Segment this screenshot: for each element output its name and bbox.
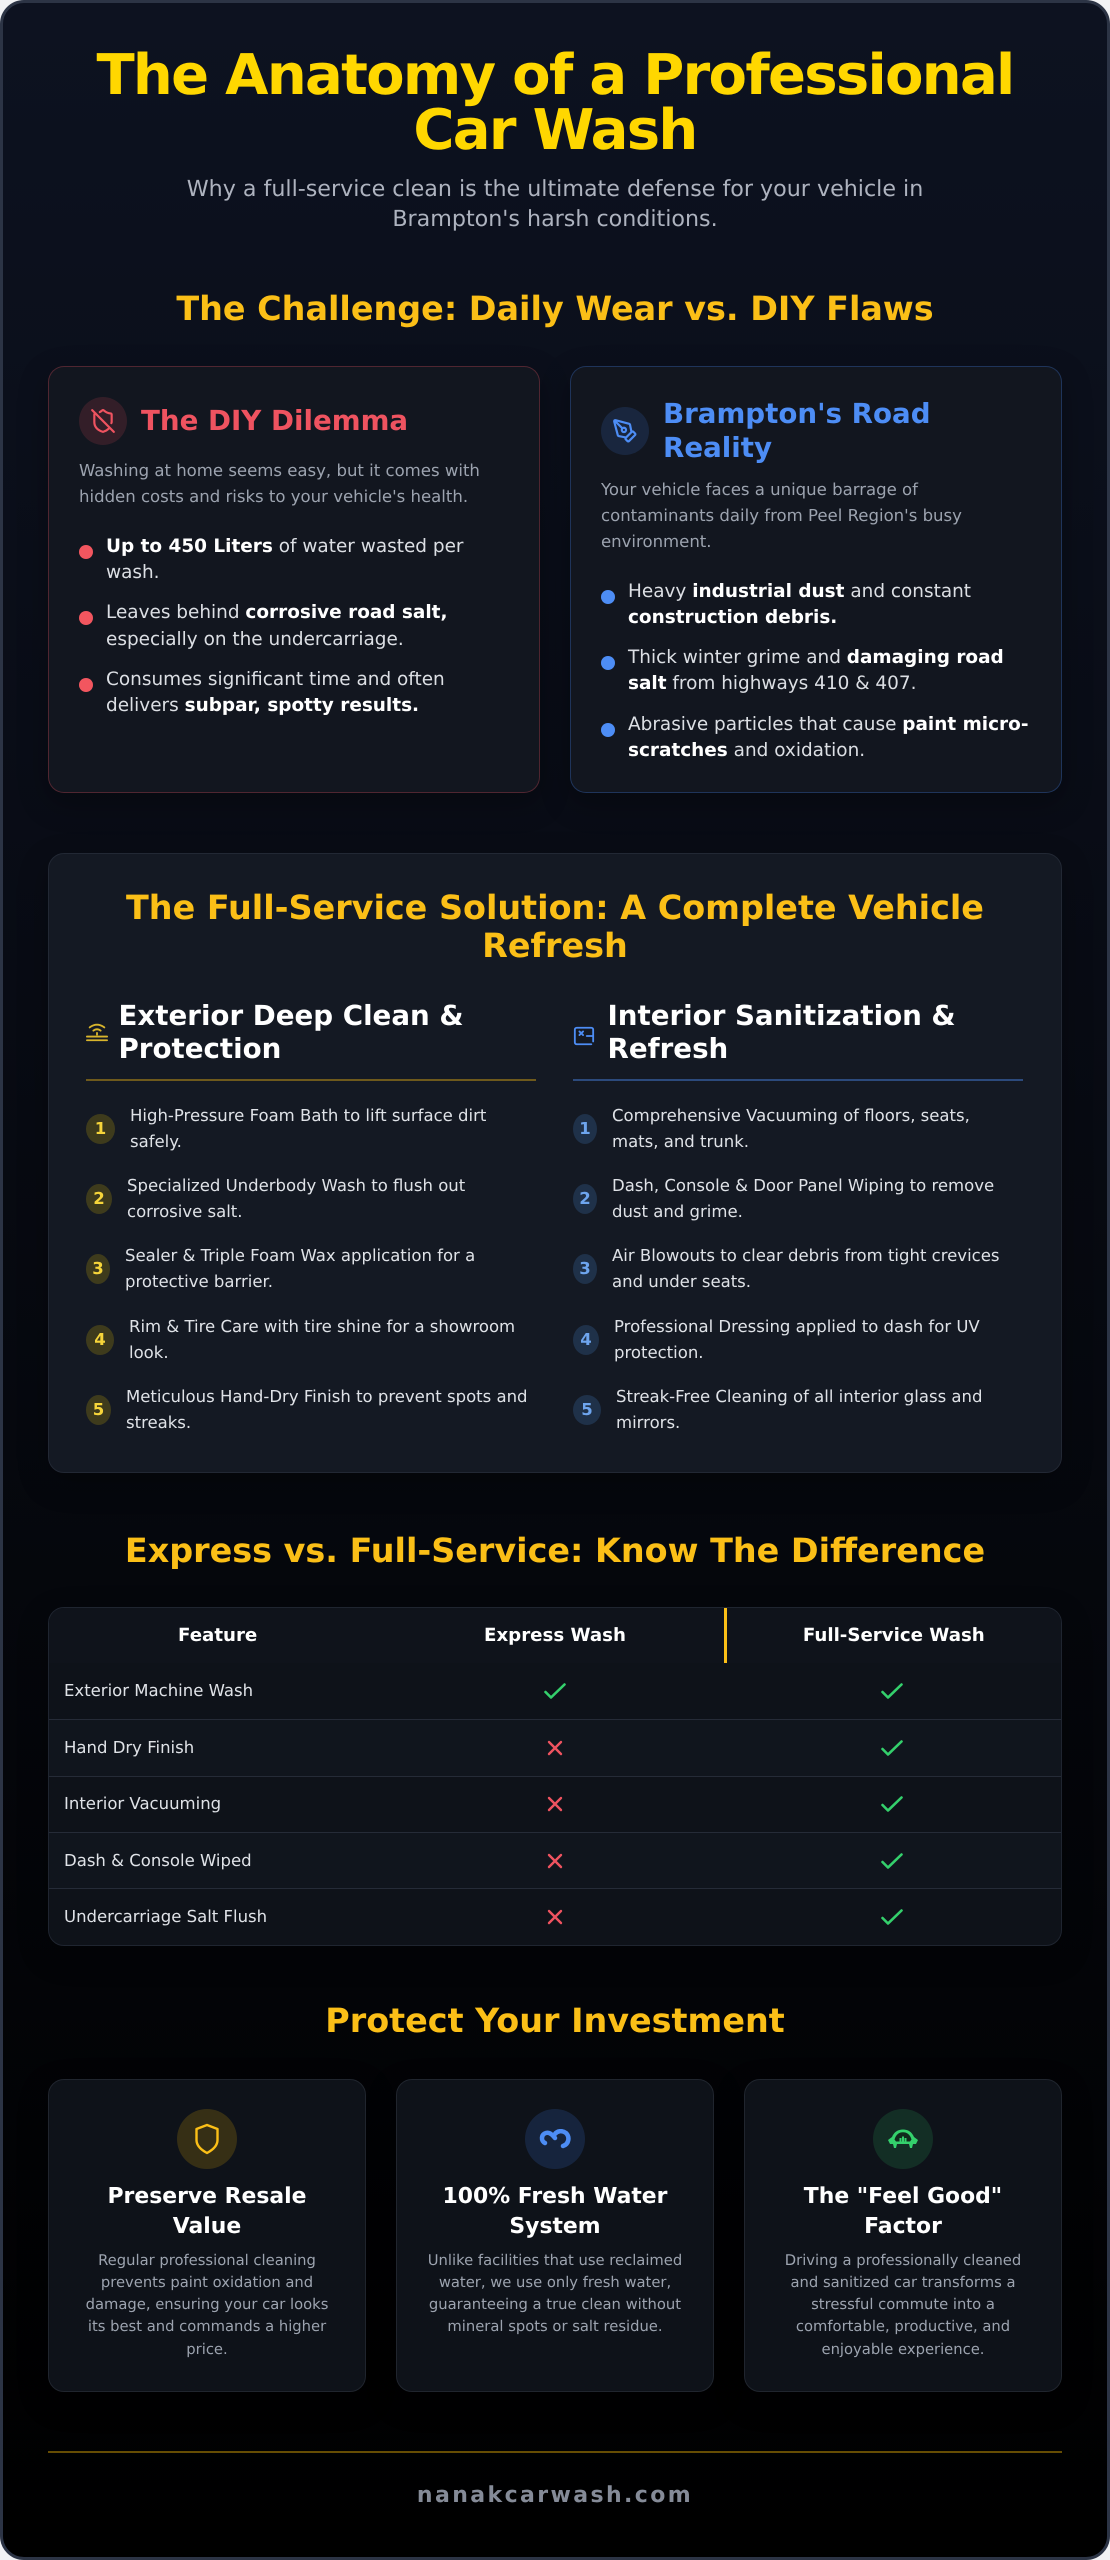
column: interior sanitization [573, 999, 1023, 1432]
benefit text: and sanitized car transforms a [790, 2274, 1015, 2291]
step 2 [573, 1176, 994, 1221]
step 3 [573, 1246, 999, 1291]
table header: Feature [178, 1625, 257, 1646]
heading: full-service solution [126, 888, 984, 964]
card description: hidden costs and risks to your vehicle's health. [79, 487, 468, 506]
step 2: Dash, Console & Door Panel Wiping to remove [612, 1176, 994, 1195]
card title: Brampton's Road [663, 397, 931, 430]
row: interior vacuuming: Interior Vacuuming [64, 1794, 221, 1813]
list: DIY problems [79, 536, 464, 716]
benefit text: prevents paint oxidation and [101, 2274, 313, 2291]
column title: Exterior Deep Clean & [118, 999, 464, 1032]
heading: full-service solution: Refresh [482, 926, 628, 964]
card description: Washing at home seems easy, but it comes with [79, 461, 480, 480]
benefit text [428, 2252, 682, 2335]
list item: Consumes significant time and often [106, 669, 445, 690]
step 3: Sealer & Triple Foam Wax application for a [125, 1246, 475, 1265]
card description: contaminants daily from Peel Region's busy [601, 506, 962, 525]
heading: protect your investment: Protect Your Investment [325, 2001, 785, 2040]
row: exterior machine wash: Exterior Machine Wash [64, 1681, 253, 1700]
step 1: mats, and trunk. [612, 1132, 749, 1150]
icon: pen nib [601, 407, 649, 455]
column title: Refresh [608, 1032, 728, 1065]
list item: especially on the undercarriage. [106, 628, 404, 650]
step 4 [86, 1316, 515, 1362]
row: hand dry finish [49, 1719, 1061, 1776]
heading: the challenge: The Challenge: Daily Wear vs. DIY Flaws [176, 289, 934, 328]
benefit title: Preserve Resale [108, 2184, 306, 2209]
step 1: 1 [95, 1118, 106, 1138]
step 4: Professional Dressing applied to dash for UV [614, 1316, 980, 1336]
benefit text: comfortable, productive, and [796, 2318, 1010, 2335]
step 4: Rim & Tire Care with tire shine for a showroom [129, 1316, 515, 1336]
benefit text: Driving a professionally cleaned [785, 2252, 1021, 2268]
row: exterior machine wash [64, 1681, 903, 1700]
benefit text: price. [186, 2341, 228, 2358]
card description: Your vehicle faces a unique barrage of [601, 480, 918, 499]
table header [49, 1608, 1061, 1663]
list item: Leaves behind corrosive road salt, [106, 602, 447, 623]
list item: salt from highways 410 & 407. [628, 673, 916, 694]
list: road hazards [601, 581, 1028, 761]
step 3 [86, 1246, 475, 1291]
benefit title: Value [173, 2214, 241, 2239]
step 3: Air Blowouts to clear debris from tight crevices [612, 1246, 999, 1265]
step 2: 2 [93, 1189, 105, 1208]
step 1: safely. [130, 1132, 182, 1150]
step 1: 1 [579, 1118, 591, 1138]
step 2: corrosive salt. [127, 1202, 243, 1221]
step 1: Comprehensive Vacuuming of floors, seats, [612, 1106, 970, 1124]
step 5 [86, 1387, 528, 1432]
card title: Reality [663, 431, 772, 464]
row: undercarriage salt flush: Undercarriage Salt Flush [64, 1907, 267, 1926]
benefit text: Regular professional cleaning [98, 2252, 316, 2268]
icon: exterior wash [86, 1024, 108, 1042]
step 3: and under seats. [612, 1272, 751, 1291]
benefit text [86, 2252, 328, 2358]
icon: shield [177, 2109, 237, 2169]
benefit text: damage, ensuring your car looks [86, 2296, 328, 2313]
benefit text: its best and commands a higher [88, 2318, 326, 2335]
list item: Abrasive particles that cause paint micro- [628, 714, 1028, 735]
panel: Brampton's road reality [570, 366, 1062, 793]
benefit title: The "Feel Good" [804, 2184, 1002, 2209]
step 5: Meticulous Hand-Dry Finish to prevent spots and [126, 1387, 528, 1406]
step 2 [86, 1176, 465, 1221]
card description [79, 461, 480, 506]
card header: DIY dilemma [79, 397, 408, 445]
list item: scratches and oxidation. [628, 740, 865, 761]
column title: Interior Sanitization & [608, 999, 956, 1032]
benefit title [443, 2184, 668, 2239]
step 1 [573, 1106, 970, 1150]
icon: shield off [79, 397, 127, 445]
row: dash and console wiped [49, 1832, 1061, 1888]
card title [663, 397, 931, 464]
title: Car Wash [413, 98, 697, 163]
card title: The DIY Dilemma [141, 404, 408, 437]
step 3: 3 [92, 1259, 104, 1278]
step 5: mirrors. [616, 1413, 680, 1432]
step 5: 5 [581, 1400, 593, 1419]
benefit text: water, we use only fresh water, [439, 2274, 671, 2291]
card header: road reality [601, 397, 931, 464]
step 4: 4 [580, 1330, 592, 1348]
icon: water flow [525, 2109, 585, 2169]
card description: environment. [601, 532, 712, 551]
column title [608, 999, 956, 1065]
icon: interior refresh [574, 1026, 594, 1046]
list item [601, 647, 1004, 694]
column title [118, 999, 464, 1065]
step 5: 5 [93, 1400, 104, 1419]
row: interior vacuuming [49, 1776, 1061, 1832]
table header: Express Wash [484, 1625, 626, 1646]
heading: express vs full-service: Express vs. Full-Service: Know The Difference [125, 1531, 985, 1570]
benefit title: Factor [864, 2214, 942, 2239]
benefit text: stressful commute into a [811, 2296, 995, 2313]
column title: Protection [118, 1032, 281, 1065]
footer website: nanakcarwash.com [417, 2483, 693, 2508]
benefit text: enjoyable experience. [822, 2341, 984, 2358]
list item: construction debris. [628, 607, 837, 628]
row: hand dry finish: Hand Dry Finish [64, 1738, 194, 1757]
benefit text: guaranteeing a true clean without [429, 2296, 681, 2313]
title [96, 42, 1014, 163]
card description [601, 480, 962, 551]
table header: Full-Service Wash [803, 1625, 985, 1646]
step 4: 4 [94, 1330, 106, 1348]
panel: the DIY dilemma [48, 366, 540, 793]
step 5: streaks. [126, 1413, 191, 1432]
panel: preserve resale value [48, 2079, 366, 2392]
benefit title: System [509, 2214, 601, 2239]
step 5: Streak-Free Cleaning of all interior glass and [616, 1387, 982, 1406]
subtitle: Brampton's harsh conditions. [392, 206, 718, 232]
benefit text: Unlike facilities that use reclaimed [428, 2252, 682, 2268]
list item [601, 714, 1028, 761]
list item: delivers subpar, spotty results. [106, 695, 419, 716]
benefit text: mineral spots or salt residue. [447, 2318, 663, 2335]
panel: feel good factor [744, 2079, 1062, 2392]
list item: Heavy industrial dust and constant [628, 581, 971, 602]
comparison table [48, 1607, 1062, 1946]
benefit title [108, 2184, 306, 2239]
step 1 [86, 1106, 486, 1150]
step 3: protective barrier. [125, 1272, 273, 1291]
step 4 [573, 1316, 980, 1362]
benefit title: 100% Fresh Water [443, 2184, 667, 2209]
row: undercarriage salt flush [49, 1888, 1061, 1944]
step 1: High-Pressure Foam Bath to lift surface dirt [130, 1106, 486, 1124]
step 3: 3 [579, 1259, 591, 1278]
title: The Anatomy of a Professional [96, 42, 1014, 108]
step 5 [573, 1387, 982, 1432]
step 2: Specialized Underbody Wash to flush out [127, 1176, 465, 1195]
panel: full-service solution [48, 853, 1062, 1473]
subtitle [187, 176, 923, 232]
icon: car front [873, 2109, 933, 2169]
step 2: 2 [579, 1189, 591, 1208]
list item: Thick winter grime and damaging road [628, 647, 1004, 668]
list item [79, 602, 447, 650]
list item [79, 669, 445, 716]
benefit title [804, 2184, 1002, 2239]
benefit text [785, 2252, 1021, 2358]
row: dash and console wiped: Dash & Console Wiped [64, 1851, 252, 1870]
heading: full-service solution: The Full-Service Solution: A Complete Vehicle [126, 888, 984, 927]
list item: wash. [106, 562, 160, 583]
step 4: look. [129, 1342, 169, 1362]
panel: fresh water system [396, 2079, 714, 2392]
step 2: dust and grime. [612, 1202, 743, 1221]
step 4: protection. [614, 1342, 704, 1362]
column: exterior deep clean [86, 999, 536, 1432]
list item: Up to 450 Liters of water wasted per [106, 536, 464, 557]
list item [601, 581, 971, 628]
list item [79, 536, 464, 583]
subtitle: Why a full-service clean is the ultimate defense for your vehicle in [187, 176, 923, 202]
